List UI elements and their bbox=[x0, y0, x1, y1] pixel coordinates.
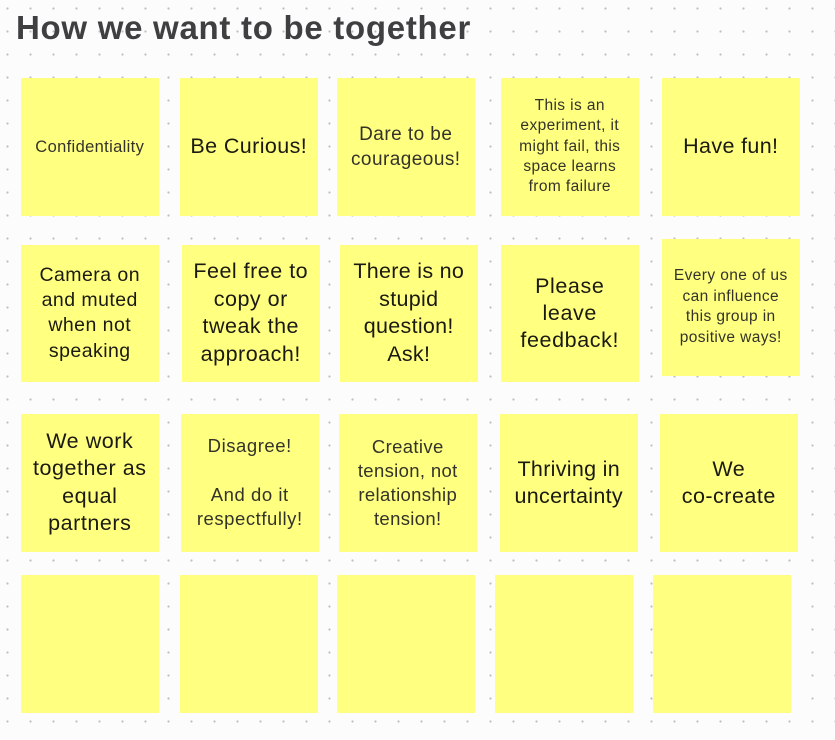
sticky note: Feel free bbox=[182, 244, 320, 382]
sticky note: No stupid question bbox=[340, 244, 478, 382]
sticky note: Thriving in uncertainty: uncertainty bbox=[514, 484, 623, 508]
sticky note: Equal partners: equal bbox=[62, 484, 117, 508]
sticky note: Feel free: Feel free to bbox=[193, 259, 308, 283]
sticky note: Confidentiality: Confidentiality bbox=[35, 138, 144, 156]
sticky note: Camera on bbox=[21, 244, 158, 382]
sticky note: Disagree: Disagree! bbox=[208, 435, 292, 456]
sticky note: Dare to be courageous bbox=[337, 78, 474, 216]
empty sticky note 5 bbox=[653, 575, 790, 712]
sticky note: Camera on: speaking bbox=[49, 340, 131, 362]
sticky note: Be Curious bbox=[180, 78, 318, 216]
empty sticky note 2 bbox=[180, 575, 318, 712]
sticky note: Equal partners: partners bbox=[48, 511, 131, 535]
sticky note: This is an experiment: might fail, this bbox=[519, 138, 620, 155]
title: How we want to be together bbox=[16, 9, 471, 46]
sticky note: Creative tension: tension, not bbox=[358, 460, 458, 481]
sticky note: Creative tension: relationship bbox=[358, 484, 457, 505]
sticky note: Please leave feedback: feedback! bbox=[520, 328, 619, 352]
sticky note: Disagree bbox=[181, 414, 318, 552]
sticky note: This is an experiment bbox=[501, 78, 638, 216]
sticky note: Creative tension bbox=[339, 414, 476, 552]
sticky note: This is an experiment: from failure bbox=[529, 178, 611, 195]
sticky note: Thriving in uncertainty: Thriving in bbox=[518, 457, 620, 481]
sticky note: No stupid question: question! bbox=[364, 314, 454, 338]
sticky note: Be Curious: Be Curious! bbox=[190, 134, 307, 158]
sticky note: Disagree: And do it bbox=[211, 484, 289, 505]
empty sticky note 3 bbox=[337, 575, 474, 712]
sticky note: Camera on: and muted bbox=[42, 289, 138, 311]
sticky note: Every one of us: Every one of us bbox=[674, 267, 788, 284]
sticky note: Feel free: tweak the bbox=[202, 314, 299, 338]
sticky note: Please leave feedback bbox=[501, 244, 638, 382]
sticky note: No stupid question: There is no bbox=[353, 259, 464, 283]
sticky note: Equal partners: together as bbox=[33, 456, 147, 480]
sticky note: Every one of us bbox=[662, 238, 800, 376]
sticky note: This is an experiment: space learns bbox=[523, 158, 616, 175]
sticky note: Equal partners: We work bbox=[46, 429, 133, 453]
empty sticky note 1 bbox=[21, 575, 158, 712]
sticky note: Creative tension: Creative bbox=[372, 436, 444, 457]
sticky note: Camera on: when not bbox=[48, 314, 131, 336]
sticky note: Please leave feedback: Please bbox=[535, 274, 604, 298]
sticky note: Confidentiality bbox=[21, 78, 158, 216]
sticky note: Please leave feedback: leave bbox=[543, 301, 597, 325]
sticky note: Camera on: Camera on bbox=[39, 264, 140, 286]
sticky note: Dare to be courageous: courageous! bbox=[351, 149, 461, 170]
sticky note: Have fun: Have fun! bbox=[683, 134, 778, 158]
sticky note: We co-create: We bbox=[712, 457, 745, 481]
sticky note: No stupid question: stupid bbox=[379, 287, 438, 311]
sticky note: Feel free: copy or bbox=[214, 287, 288, 311]
sticky note: Thriving in uncertainty bbox=[500, 414, 638, 552]
sticky note: Dare to be courageous: Dare to be bbox=[359, 124, 452, 145]
sticky note: This is an experiment: This is an bbox=[535, 97, 605, 114]
sticky note: Equal partners bbox=[21, 414, 158, 552]
sticky note: Every one of us: this group in bbox=[686, 308, 776, 325]
sticky note: Creative tension: tension! bbox=[374, 508, 442, 529]
sticky note: We co-create: co-create bbox=[682, 484, 776, 508]
empty sticky note 4 bbox=[495, 575, 632, 712]
sticky note: Disagree: respectfully! bbox=[197, 508, 303, 529]
sticky note: This is an experiment: experiment, it bbox=[520, 117, 619, 134]
sticky note: Every one of us: positive ways! bbox=[680, 329, 782, 346]
sticky note: We co-create bbox=[660, 414, 798, 552]
sticky note: Feel free: approach! bbox=[201, 342, 301, 366]
sticky note: Have fun bbox=[662, 78, 800, 216]
sticky note: Every one of us: can influence bbox=[682, 288, 779, 305]
sticky note: No stupid question: Ask! bbox=[387, 342, 430, 366]
